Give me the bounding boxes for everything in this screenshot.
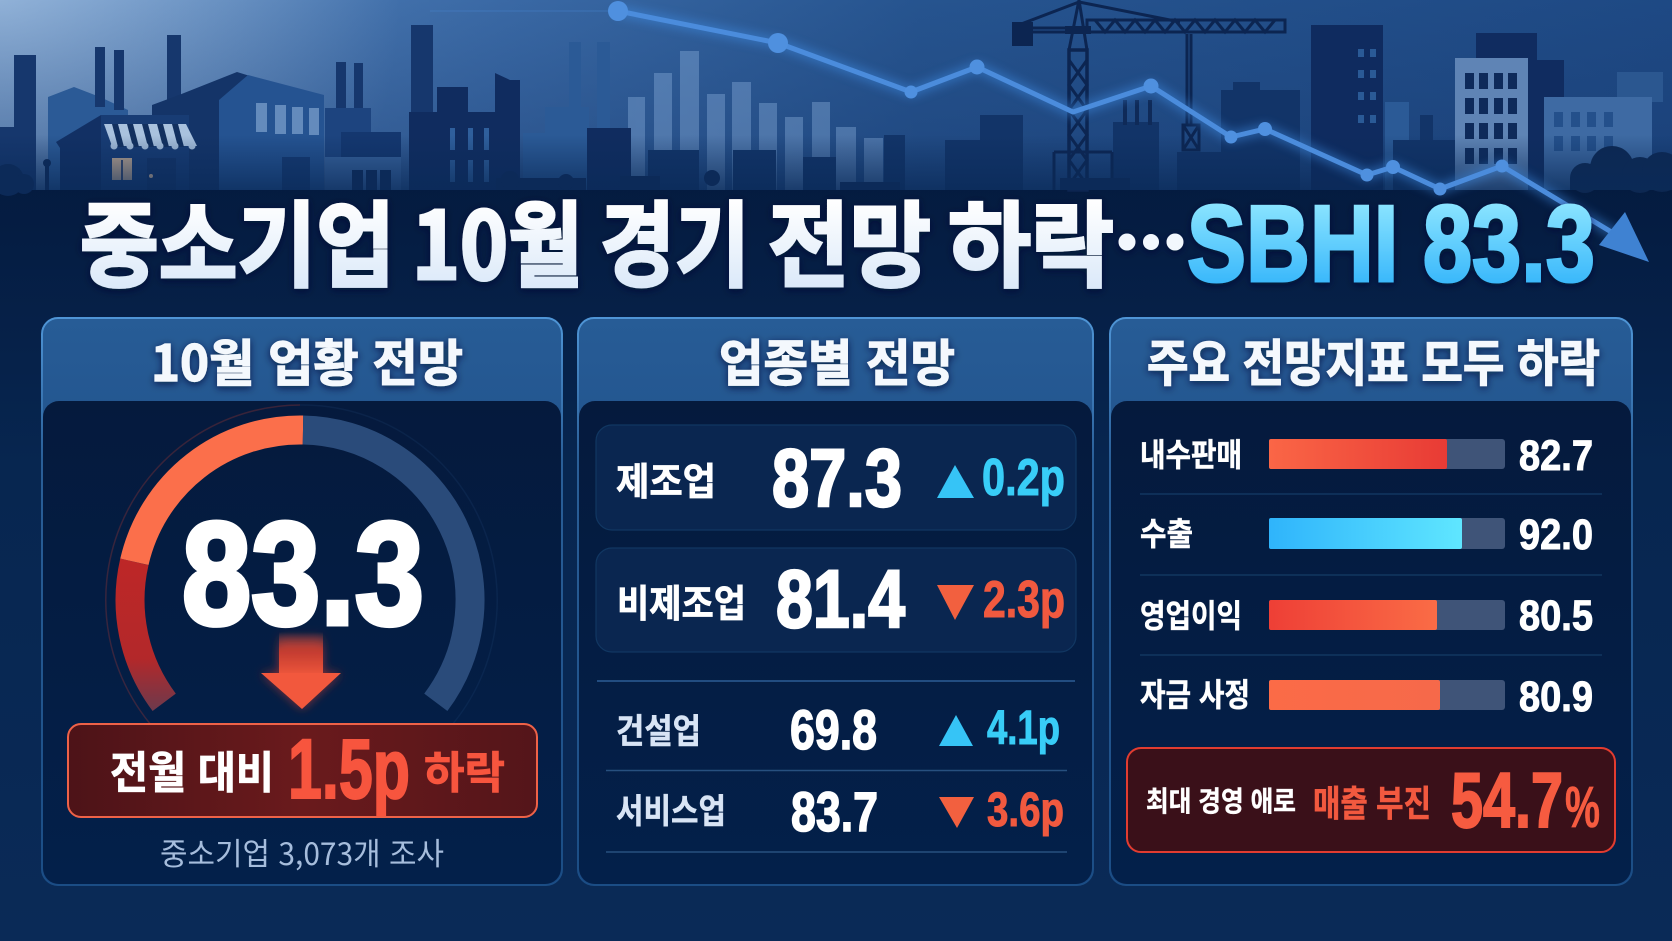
distant buildings: [48, 42, 1409, 190]
bar row: 수출: 92.0: [1519, 511, 1593, 559]
panel: 업종별 전망: [578, 318, 1093, 885]
row: 비제조업: 81.4: [776, 554, 905, 645]
row: 서비스업: 3.6p: [987, 784, 1064, 837]
row: 제조업: 0.2p: [982, 449, 1065, 507]
callout: month-on-month change: [68, 722, 537, 817]
gauge chart: [106, 405, 497, 738]
row: 제조업: [596, 425, 1076, 530]
factory chimneys: [0, 25, 433, 190]
row: 비제조업: [596, 548, 1076, 652]
callout: 매출 부진: 매출 부진: [1313, 775, 1431, 827]
bar row: 내수판매: 내수판매: [1140, 430, 1242, 476]
foreground silhouettes: [0, 159, 1130, 196]
row: 건설업: 건설업: [616, 704, 701, 753]
callout: 매출 부진: %: [1565, 775, 1600, 840]
heading: 10월 업황 전망: [151, 324, 463, 396]
down arrow: [261, 632, 341, 709]
row: 건설업: 4.1p: [987, 702, 1060, 755]
shop with awning: [56, 115, 197, 190]
heading: 업종별 전망: [719, 324, 955, 396]
row: 서비스업: [616, 780, 1064, 843]
bar row: 자금 사정: 80.9: [1519, 673, 1593, 721]
bar row: 수출: [1140, 509, 1593, 559]
horizon fade: [0, 135, 1672, 190]
panel: 주요 전망지표 모두 하락: [1110, 318, 1632, 885]
row: 제조업: 제조업: [616, 451, 716, 506]
row: 비제조업: 비제조업: [617, 573, 746, 628]
title: 10월: [412, 171, 583, 306]
falling trend line with arrow: [430, 1, 1649, 262]
bar row: 내수판매: 82.7: [1519, 432, 1593, 480]
row: 비제조업: 2.3p: [983, 571, 1065, 629]
callout: month-on-month change: 전월 대비: [110, 737, 274, 801]
title: 하락: [948, 171, 1114, 306]
bar row: 내수판매: [1140, 430, 1593, 480]
row: 서비스업: 서비스업: [616, 784, 726, 833]
bar row: 영업이익: [1140, 591, 1593, 640]
translucent chart bars: [628, 51, 883, 190]
row: 건설업: [616, 698, 1060, 761]
title: 중소기업: [80, 171, 395, 306]
panel: 10월 업황 전망: [42, 318, 562, 885]
bar row: 자금 사정: [1140, 670, 1593, 721]
heading: 주요 전망지표 모두 하락: [1147, 324, 1600, 396]
bar row: 영업이익: 영업이익: [1140, 591, 1242, 637]
mid factory blocks: [325, 108, 401, 190]
survey note: 중소기업 3,073개 조사: [160, 829, 444, 874]
bar row: 수출: 수출: [1140, 509, 1193, 555]
title: 경기: [600, 171, 750, 306]
main factory: [152, 72, 250, 190]
bar row: 자금 사정: 자금 사정: [1140, 670, 1250, 716]
title: [80, 171, 1595, 306]
bar row: 영업이익: 80.5: [1519, 592, 1593, 640]
small low buildings: [648, 82, 1455, 190]
callout: 매출 부진: 54.7: [1451, 756, 1563, 844]
title: 전망: [768, 171, 931, 306]
callout: 매출 부진: [1127, 748, 1615, 852]
row: 서비스업: 83.7: [791, 780, 878, 843]
callout: month-on-month change: 1.5p: [288, 722, 410, 816]
row: 제조업: 87.3: [772, 433, 902, 524]
title ellipsis: [1118, 234, 1184, 250]
right apartment towers: [1455, 33, 1672, 193]
gauge value: 83.3: [182, 492, 424, 655]
callout: month-on-month change: 하락: [424, 737, 505, 801]
tower crane: [1016, 0, 1285, 190]
scaffold towers: [1125, 100, 1150, 125]
tall dark tower: [1311, 25, 1383, 190]
callout: 매출 부진: 최대 경영 애로: [1146, 780, 1296, 820]
row: 건설업: 69.8: [790, 698, 877, 761]
